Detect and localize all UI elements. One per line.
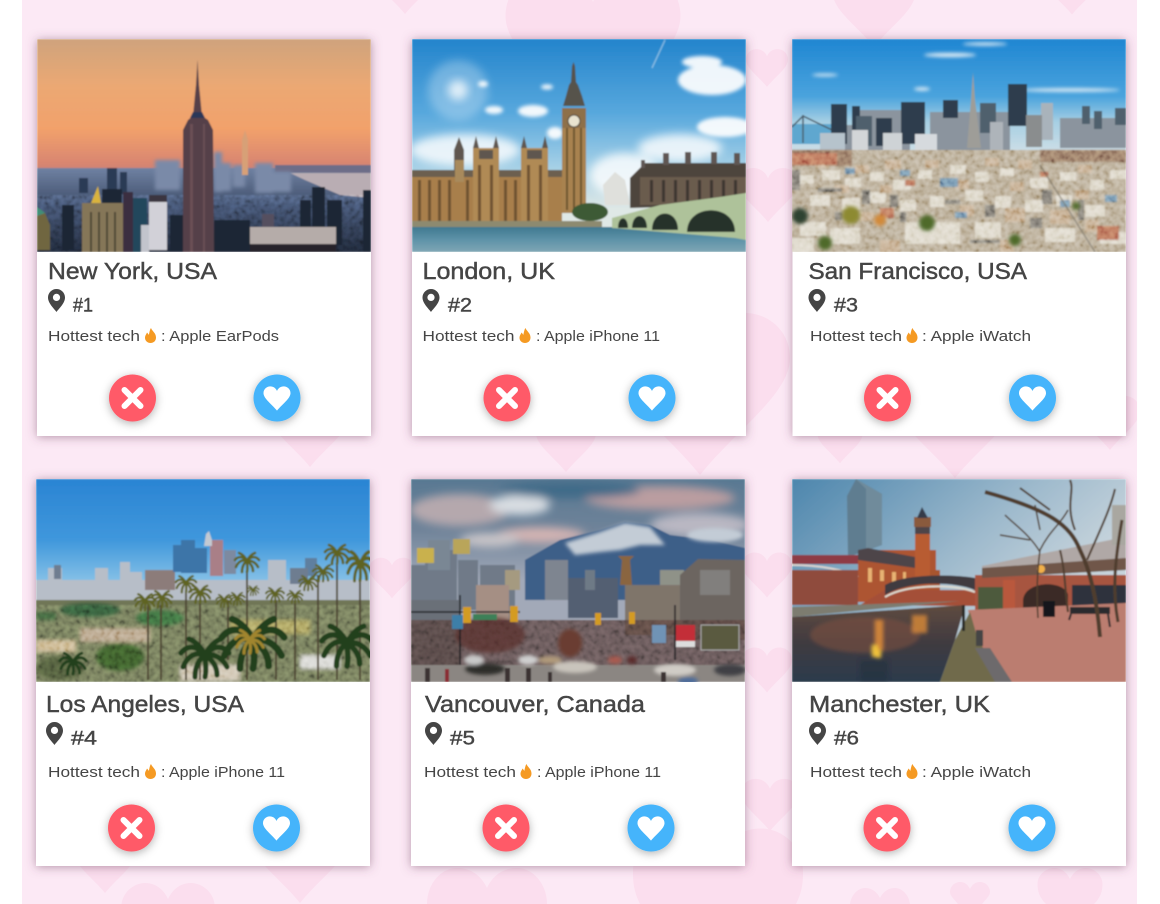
city name: London, UK — [422, 258, 556, 284]
hottest tech: Hottest tech — [424, 764, 516, 781]
card: Los Angeles — [36, 479, 373, 866]
like button — [1009, 374, 1056, 422]
card: Vancouver — [410, 479, 750, 866]
photo: Big Ben and Westminster — [410, 39, 753, 252]
card: San Francisco — [792, 39, 1126, 436]
like button — [253, 804, 300, 852]
reject button — [484, 374, 530, 422]
photo: Manchester canal — [792, 479, 1126, 682]
reject button — [864, 374, 911, 422]
city name: New York, USA — [48, 258, 218, 284]
hottest tech: : Apple iPhone 11 — [537, 764, 661, 781]
rank: #1 — [73, 296, 93, 316]
photo: San Francisco skyline — [792, 39, 1126, 252]
city name: Manchester, UK — [809, 691, 991, 717]
rank: #2 — [448, 296, 472, 316]
rank: #6 — [834, 728, 859, 750]
hottest tech: Hottest tech — [810, 328, 902, 345]
location pin — [422, 289, 440, 312]
hottest tech: Hottest tech — [48, 328, 140, 345]
like button — [1008, 804, 1056, 852]
reject button — [109, 374, 156, 422]
rank: #3 — [834, 296, 858, 316]
like button — [254, 374, 300, 422]
photo: Los Angeles skyline and palms — [36, 479, 373, 682]
like button — [628, 804, 674, 852]
city name: San Francisco, USA — [808, 258, 1028, 284]
hottest tech — [424, 764, 661, 781]
hottest tech: : Apple iWatch — [922, 764, 1031, 781]
card: New York — [37, 39, 371, 436]
location pin — [809, 722, 826, 745]
rank: #5 — [450, 728, 475, 750]
reject button — [482, 804, 530, 852]
city name: Vancouver, Canada — [425, 691, 645, 717]
photo: New York skyline — [37, 39, 371, 252]
rank: #4 — [71, 728, 98, 750]
reject button — [108, 804, 155, 852]
hottest tech — [48, 764, 285, 781]
photo: Vancouver street and mountains — [410, 479, 750, 685]
like button — [628, 374, 676, 422]
hottest tech: : Apple EarPods — [161, 328, 279, 345]
hottest tech — [48, 328, 279, 345]
reject button — [864, 804, 910, 852]
hottest tech: Hottest tech — [810, 764, 902, 781]
hottest tech: : Apple iPhone 11 — [536, 328, 660, 345]
location pin — [48, 289, 65, 312]
hottest tech: Hottest tech — [422, 328, 514, 345]
location pin — [46, 722, 63, 745]
location pin — [425, 722, 442, 745]
card: London — [410, 39, 753, 436]
card: Manchester — [792, 479, 1126, 866]
hottest tech: Hottest tech — [48, 764, 140, 781]
location pin — [808, 289, 826, 312]
hottest tech — [810, 764, 1031, 781]
hottest tech — [810, 328, 1031, 345]
hottest tech: : Apple iPhone 11 — [161, 764, 285, 781]
hottest tech: : Apple iWatch — [922, 328, 1031, 345]
hottest tech — [422, 328, 660, 345]
city name: Los Angeles, USA — [46, 691, 245, 717]
